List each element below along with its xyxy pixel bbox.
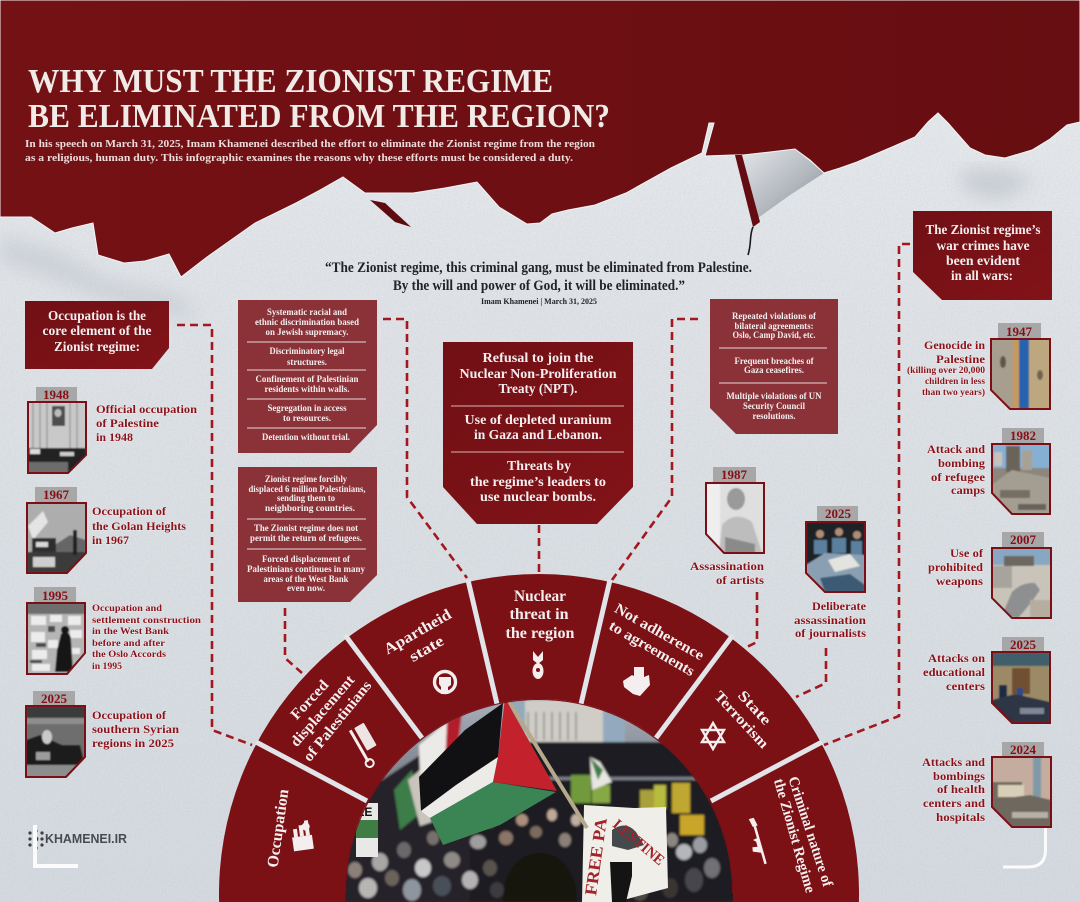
item: 2025 educational centers — [923, 637, 1050, 723]
box: apartheid state details: ethnic discrimination based — [255, 318, 360, 328]
quote: Imam Khamenei | March 31, 2025 — [481, 297, 597, 306]
box: apartheid state details: on Jewish supremacy. — [266, 328, 348, 338]
item: 2024 health centers: centers and — [923, 798, 986, 810]
box: agreement violations details: Frequent breaches of — [734, 357, 814, 367]
icon: star of David — [702, 723, 724, 749]
box: forced displacement details: displaced 6 million Palestinians, — [248, 485, 366, 495]
item: 2025 educational centers: educational — [923, 667, 985, 679]
item: 1982 refugee camps: bombing — [938, 458, 985, 470]
box: war crimes — [913, 211, 1052, 300]
item: 1948 occupation of Palestine: 1948 — [43, 387, 70, 402]
icon: factory — [290, 820, 314, 851]
intro text: In his speech on March 31, 2025, Imam Khamenei described the effort to eliminate the Zionist regime from the region — [25, 138, 595, 150]
protest banner — [581, 805, 668, 902]
box: nuclear threat details: Refusal to join the — [482, 351, 594, 366]
box: nuclear threat details: in Gaza and Lebanon. — [474, 428, 602, 443]
quote: “The Zionist regime, this criminal gang, must be eliminated from Palestine. — [325, 260, 752, 276]
quote — [325, 260, 752, 306]
segment: criminal nature: Criminal nature of — [784, 775, 835, 890]
segment: nuclear threat — [506, 588, 575, 679]
box: forced displacement details — [238, 467, 377, 602]
item: 2024 health centers — [922, 742, 1051, 827]
item: 1982 refugee camps: Attack and — [927, 444, 986, 456]
item: 2024 health centers: bombings — [933, 771, 986, 783]
item: 1948 occupation of Palestine: of Palestine — [96, 418, 159, 430]
segment: nuclear threat: threat in — [510, 606, 569, 623]
item: 1982 refugee camps — [927, 428, 1050, 514]
segment: forced displacement — [288, 673, 385, 769]
box: agreement violations details: Gaza ceasefires. — [744, 366, 804, 376]
logo: KHAMENEI.IR: KHAMENEI.IR — [45, 832, 127, 846]
item: 1982 refugee camps: camps — [951, 485, 986, 497]
segment: apartheid state: Apartheid — [381, 606, 455, 658]
crack centre — [735, 155, 760, 255]
item: 2025 southern Syria: regions in 2025 — [92, 738, 174, 750]
box: forced displacement details: Palestinians continues in many — [247, 565, 365, 575]
intro text — [25, 138, 595, 164]
box: forced displacement details: The Zionist regime does not — [254, 524, 359, 534]
item: 1995 West Bank settlement: before and after — [92, 639, 166, 649]
item: 2024 health centers: Attacks and — [922, 757, 986, 769]
box: apartheid state details: Systematic racial and — [267, 308, 348, 318]
item: 1995 West Bank settlement: in the West Bank — [92, 627, 170, 637]
segment: nuclear threat: the region — [506, 625, 575, 642]
box: apartheid state details: Confinement of Palestinian — [256, 375, 359, 385]
item: 1982 refugee camps: of refugee — [931, 472, 985, 484]
box: apartheid state details: Segregation in access — [268, 404, 347, 414]
item: 2025 educational centers: 2025 — [1010, 637, 1036, 652]
item: 1947 genocide: 1947 — [1006, 324, 1032, 339]
box: forced displacement details: neighboring countries. — [265, 504, 355, 514]
Palestinian flag — [419, 698, 557, 845]
icon: handshake and document — [623, 667, 650, 696]
logo: KHAMENEI.IR — [28, 829, 127, 850]
item: 2025 southern Syria — [26, 691, 180, 777]
segment: occupation: Occupation — [265, 788, 292, 869]
box: nuclear threat details: use nuclear bombs. — [480, 490, 596, 505]
item: 1995 West Bank settlement — [27, 587, 202, 674]
box: nuclear threat details: the regime’s leaders to — [470, 475, 606, 490]
item: 1967 Golan Heights: 1967 — [43, 487, 70, 502]
box: agreement violations details: Oslo, Camp David, etc. — [732, 331, 816, 341]
box: occupation core element: Occupation is the — [48, 308, 146, 323]
item: 1948 occupation of Palestine — [28, 387, 198, 474]
item: 2025 assassination of journalists — [794, 506, 867, 640]
item: 2025 assassination of journalists: of journalists — [795, 628, 867, 640]
shaded paper flap under tear — [741, 149, 824, 218]
item: 1987 assassination of artists: Assassination — [690, 561, 765, 573]
item: 1967 Golan Heights: the Golan Heights — [92, 521, 187, 533]
box: war crimes: in all wars: — [951, 268, 1013, 283]
item: 1967 Golan Heights: Occupation of — [92, 506, 166, 518]
box: apartheid state details: structures. — [287, 358, 327, 368]
box: agreement violations details — [710, 299, 838, 434]
item: 1987 assassination of artists — [690, 467, 765, 587]
protest banner: FREE PA — [581, 816, 611, 897]
item: 1995 West Bank settlement: in 1995 — [92, 662, 122, 672]
central protest photo — [345, 695, 740, 902]
box: nuclear threat details — [443, 342, 633, 524]
box: occupation core element: Zionist regime: — [54, 339, 140, 354]
box: apartheid state details: Discriminatory legal — [270, 347, 345, 357]
item: 1947 genocide — [907, 323, 1050, 409]
item: 1982 refugee camps: 1982 — [1010, 428, 1036, 443]
box: nuclear threat details: Use of depleted uranium — [464, 413, 612, 428]
item: 2025 southern Syria: southern Syrian — [92, 724, 180, 736]
item: 1995 West Bank settlement: Occupation and — [92, 604, 163, 614]
quote: By the will and power of God, it will be eliminated.” — [393, 278, 685, 294]
icon: raised fist — [434, 672, 456, 694]
segment: apartheid state — [381, 606, 456, 694]
item: 2025 southern Syria: Occupation of — [92, 710, 166, 722]
crack left — [370, 200, 411, 227]
box: war crimes: The Zionist regime’s — [926, 222, 1040, 237]
item: 1947 genocide: Genocide in — [924, 340, 986, 352]
title — [28, 63, 610, 135]
segment: not adherence: to agreements — [606, 618, 697, 680]
box: agreement violations details: Multiple violations of UN — [726, 392, 822, 402]
segment: nuclear threat: Nuclear — [514, 588, 566, 605]
box: apartheid state details: residents within walls. — [264, 385, 350, 395]
item: 1967 Golan Heights — [27, 487, 187, 573]
icon: key and bag — [347, 723, 385, 769]
icon: bomb — [532, 651, 544, 679]
box: agreement violations details: bilateral agreements: — [734, 322, 814, 332]
title: BE ELIMINATED FROM THE REGION? — [28, 98, 610, 135]
box: agreement violations details: Security Council — [743, 402, 805, 412]
segment: criminal nature — [744, 775, 835, 895]
item: 1948 occupation of Palestine: Official occupation — [96, 404, 198, 416]
item: 1995 West Bank settlement: settlement construction — [92, 616, 202, 626]
item: 2024 health centers: of health — [937, 784, 986, 796]
connector lines — [177, 244, 910, 745]
box: nuclear threat details: Threats by — [507, 459, 571, 474]
title: WHY MUST THE ZIONIST REGIME — [28, 63, 553, 100]
item: 2024 health centers: 2024 — [1010, 742, 1036, 757]
box: war crimes: been evident — [946, 253, 1021, 268]
box: forced displacement details: sending them to — [277, 494, 335, 504]
segment: forced displacement: Forced — [288, 677, 333, 723]
item: 2025 southern Syria: 2025 — [41, 691, 68, 706]
item: 1947 genocide: Palestine — [936, 354, 985, 366]
box: forced displacement details: Zionist regime forcibly — [265, 475, 347, 485]
box: apartheid state details — [238, 300, 377, 453]
item: 1987 assassination of artists: of artists — [716, 575, 765, 587]
sign white left: LE — [357, 805, 372, 819]
segment: state terrorism: Terrorism — [711, 688, 772, 752]
item: 1995 West Bank settlement: 1995 — [42, 588, 68, 603]
box: forced displacement details: areas of the West Bank — [264, 575, 349, 585]
item: 2025 educational centers: Attacks on — [928, 653, 986, 665]
icon: rifle — [744, 817, 768, 866]
item: 2007 prohibited weapons: weapons — [936, 576, 984, 588]
inner ring edge — [346, 700, 732, 893]
item: 2025 assassination of journalists: 2025 — [825, 506, 852, 521]
item: 1948 occupation of Palestine: in 1948 — [96, 432, 133, 444]
semicircular wheel — [219, 574, 859, 902]
item: 2007 prohibited weapons: 2007 — [1010, 532, 1036, 547]
intro text: as a religious, human duty. This infographic examines the reasons why these efforts must be considered a duty. — [25, 152, 573, 164]
item: 2024 health centers: hospitals — [936, 812, 986, 824]
corner bracket right — [1003, 823, 1046, 867]
box: nuclear threat details: Treaty (NPT). — [498, 382, 578, 397]
segment: forced displacement: of Palestinians — [301, 678, 375, 765]
item: 2025 assassination of journalists: Deliberate — [812, 601, 866, 613]
item: 2025 assassination of journalists: assassination — [794, 615, 867, 627]
box: agreement violations details: Repeated violations of — [732, 312, 817, 322]
segment: not adherence: Not adherence — [612, 601, 707, 664]
segment: forced displacement: displacement — [288, 673, 358, 750]
box: apartheid state details: to resources. — [283, 414, 331, 424]
item: 2007 prohibited weapons — [928, 532, 1051, 618]
item: 2025 educational centers: centers — [946, 681, 986, 693]
item: 1947 genocide: children in less — [925, 376, 986, 386]
box: forced displacement details: Forced displacement of — [262, 555, 351, 565]
box: nuclear threat details: Nuclear Non-Proliferation — [460, 367, 617, 382]
box: forced displacement details: even now. — [287, 584, 325, 594]
box: apartheid state details: Detention without trial. — [262, 433, 350, 443]
box: occupation core element — [25, 301, 169, 369]
flag pole — [505, 695, 587, 828]
item: 2007 prohibited weapons: Use of — [950, 548, 983, 560]
segment: not adherence — [606, 601, 707, 696]
segment: criminal nature: the Zionist Regime — [770, 777, 818, 895]
box: war crimes: war crimes have — [936, 238, 1030, 253]
box: agreement violations details: resolutions. — [752, 412, 796, 422]
segment: apartheid state: state — [406, 632, 447, 666]
protest banner: LESTINE — [609, 817, 667, 869]
torn red header background — [0, 0, 1080, 277]
segment: occupation — [265, 788, 314, 869]
item: 1947 genocide: than two years) — [922, 387, 985, 397]
item: 1947 genocide: (killing over 20,000 — [907, 365, 986, 375]
corner bracket left — [35, 825, 78, 866]
item: 1967 Golan Heights: in 1967 — [92, 535, 129, 547]
segment: state terrorism: State — [734, 688, 774, 729]
box: occupation core element: core element of the — [42, 323, 152, 338]
sign white left — [356, 803, 378, 857]
item: 1987 assassination of artists: 1987 — [721, 467, 748, 482]
box: forced displacement details: permit the return of refugees. — [250, 534, 362, 544]
item: 2007 prohibited weapons: prohibited — [928, 562, 984, 574]
item: 1995 West Bank settlement: the Oslo Accords — [92, 650, 166, 660]
